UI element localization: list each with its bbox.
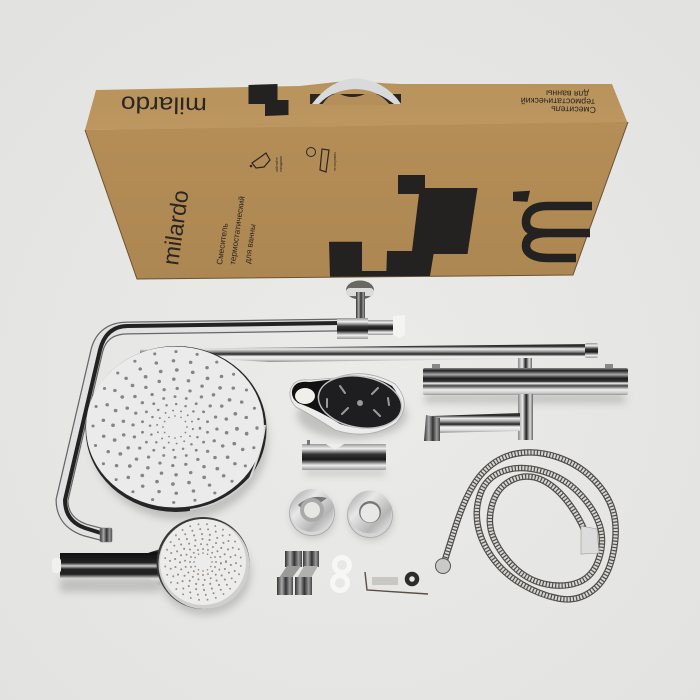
valve body [337, 318, 368, 339]
logo on box front: milardo [157, 188, 193, 267]
logo on box top: milardo [121, 91, 207, 119]
left connector [277, 551, 302, 595]
icon: pipe warning: не нагревать [333, 152, 337, 171]
rubber washer [407, 574, 417, 584]
hose nut [436, 558, 450, 574]
dish slots [327, 386, 389, 416]
product name on box front: Смеситель [215, 223, 230, 265]
white rings [332, 558, 350, 590]
dish oval [314, 370, 406, 434]
valve knob [346, 280, 374, 300]
big black pattern on box front [329, 175, 478, 277]
head [156, 517, 250, 609]
spray nozzles [92, 350, 258, 504]
Y connectors [277, 551, 319, 595]
large m logo [526, 206, 592, 258]
valve stem [356, 292, 365, 319]
thermostat mixer [423, 358, 628, 441]
box edges [85, 122, 628, 279]
ceiling connector valve [337, 280, 405, 339]
screw piece [372, 577, 398, 585]
cardboard box [85, 78, 628, 279]
large m logo dot [513, 191, 530, 202]
handle [60, 549, 160, 585]
product name on box top: для ванны [546, 88, 589, 99]
shower arm [62, 323, 340, 542]
slider bracket [302, 440, 386, 470]
product name on box front: термостатический [228, 196, 247, 265]
spout end [424, 415, 440, 441]
dish hole [295, 388, 315, 404]
right connector [295, 551, 319, 595]
mixer body [423, 368, 628, 395]
box front face [85, 122, 628, 279]
shadows [60, 360, 625, 615]
product name on box top: Смеситель [551, 104, 596, 115]
wall flange right [348, 490, 392, 538]
vertical outlet [518, 394, 533, 440]
slide rail [140, 343, 598, 362]
icon: hand: избегайте [275, 157, 279, 172]
carry handle [310, 78, 401, 105]
valve tail [368, 320, 393, 335]
icon: hand: попадания [279, 156, 283, 172]
white cap [393, 315, 405, 338]
icon: hand [250, 153, 283, 172]
box top face [85, 81, 628, 130]
top connector [518, 358, 532, 368]
spray nozzles [161, 520, 245, 604]
product name on box top [521, 88, 596, 115]
hex key [365, 572, 428, 594]
mixer pins [432, 364, 440, 368]
black pattern on box top [248, 84, 288, 116]
wall flange left [290, 489, 334, 536]
spout horizontal [432, 413, 520, 433]
icon: pipe warning [306, 148, 337, 172]
flexible hose [436, 452, 616, 599]
arm end nut [100, 528, 112, 542]
product name on box front: для ванны [243, 223, 258, 264]
product name on box top: термостатический [521, 96, 595, 107]
hand shower [52, 517, 250, 609]
rail end cap [585, 343, 598, 358]
handle white cap [52, 558, 61, 573]
hose end fitting [581, 526, 599, 554]
rain shower head [86, 346, 266, 512]
soap dish [290, 370, 406, 434]
product name on box front [215, 196, 258, 265]
